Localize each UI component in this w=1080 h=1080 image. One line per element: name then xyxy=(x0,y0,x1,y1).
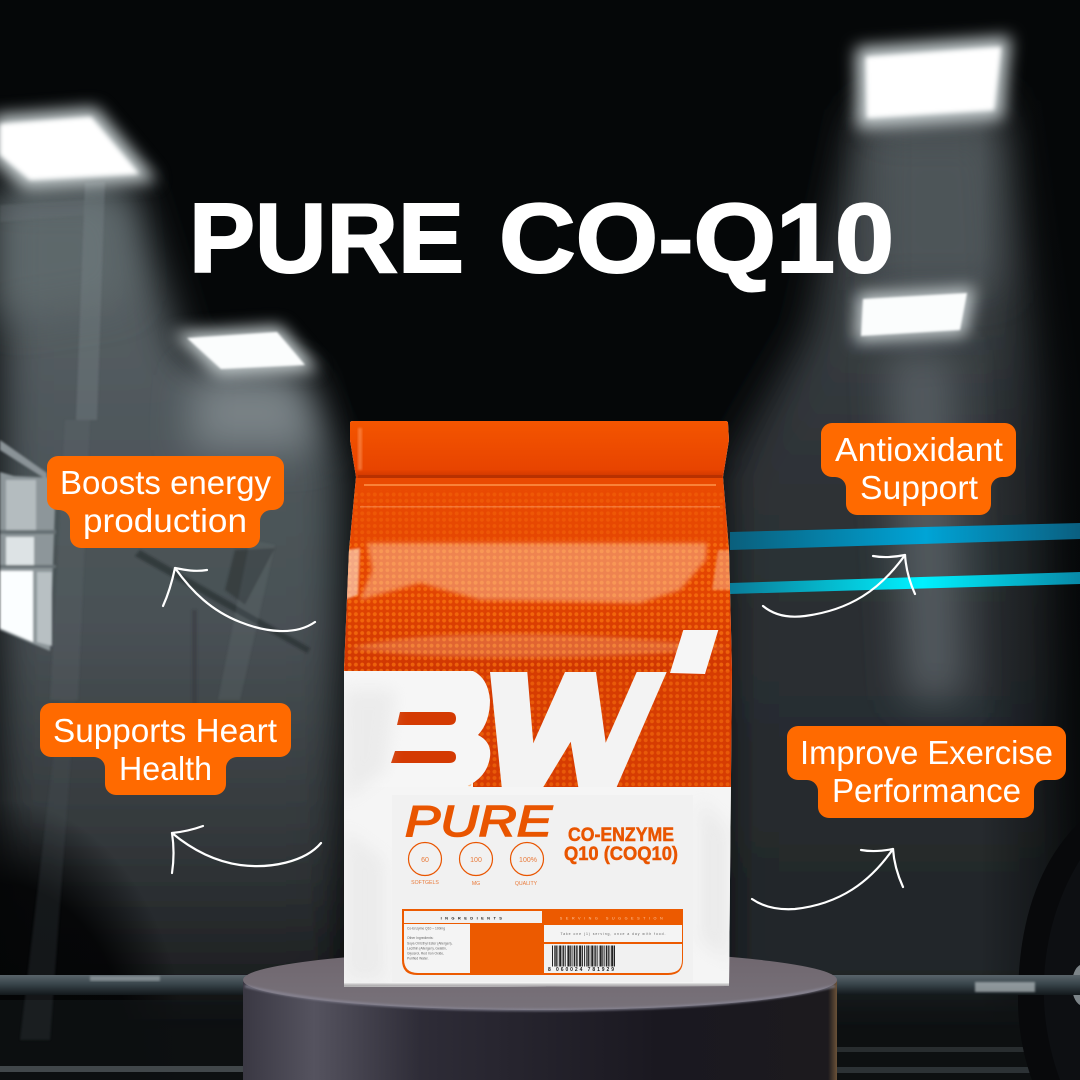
icon: ceiling light top left xyxy=(0,115,143,182)
product name: Q10 (COQ10) xyxy=(564,843,678,865)
window on the left wall xyxy=(0,440,56,651)
arrow: to supports heart xyxy=(172,826,321,873)
callout: boosts energy production: production xyxy=(83,502,247,539)
barbell xyxy=(0,975,1080,995)
arrow: to boosts energy xyxy=(163,568,315,631)
spec badge text: 60 xyxy=(421,857,429,864)
pure logo text: PURE xyxy=(405,797,553,846)
callout: supports heart health xyxy=(40,703,291,795)
arrow: to improve exercise xyxy=(752,849,903,909)
product name xyxy=(564,824,678,865)
barcode xyxy=(548,956,616,973)
information box: Purified Water. xyxy=(407,956,429,960)
spec badge text: QUALITY xyxy=(515,881,538,887)
icon: ceiling light left middle xyxy=(185,331,308,370)
information box: Other Ingredients: xyxy=(407,936,433,940)
callout: antioxidant support: Support xyxy=(860,469,978,506)
callout: antioxidant support xyxy=(821,423,1016,515)
information box: Co-Enzyme Q10 – 100mg xyxy=(407,926,445,930)
product bag xyxy=(340,421,743,989)
callout: boosts energy production: Boosts energy xyxy=(60,464,271,501)
title: PURE xyxy=(189,183,464,293)
spec badge text: SOFTGELS xyxy=(411,880,439,886)
callout: improve exercise performance: Performance xyxy=(832,772,1021,809)
icon: ceiling light right middle xyxy=(860,292,969,337)
arrow: to antioxidant xyxy=(763,555,915,617)
information box: Soya Oil Ethyl Ester (Allergen), xyxy=(407,942,453,946)
spec badge text: 100 xyxy=(470,857,482,864)
information box xyxy=(402,909,683,975)
callout: supports heart health: Supports Heart xyxy=(53,712,277,749)
title: CO-Q10 xyxy=(499,183,894,293)
product label xyxy=(392,795,693,982)
callout: boosts energy production xyxy=(47,456,284,548)
bw logo xyxy=(340,630,718,787)
information box: Lecithin (Allergen), Gelatin, xyxy=(407,946,447,950)
spec badges xyxy=(408,842,544,876)
barcode: 8 060024 781929 xyxy=(548,967,614,973)
icon: ceiling light top right xyxy=(862,43,1004,122)
product name: CO-ENZYME xyxy=(568,824,674,846)
callout: supports heart health: Health xyxy=(119,750,212,787)
callout: improve exercise performance xyxy=(787,726,1066,818)
spec badge text: MG xyxy=(472,881,480,887)
podium xyxy=(243,950,837,1080)
weight plate xyxy=(1018,822,1080,1080)
blue wall stripes xyxy=(730,523,1080,594)
information box: INGREDIENTS xyxy=(441,916,505,920)
information box: Glycerol, Red Iron Oxide, xyxy=(407,952,444,956)
information box: SERVING SUGGESTION xyxy=(560,916,666,920)
spec badge text xyxy=(411,857,538,887)
spec badge text: 100% xyxy=(519,857,537,864)
callout: antioxidant support: Antioxidant xyxy=(835,431,1003,468)
information box: Take one (1) serving, once a day with food. xyxy=(560,932,666,936)
callout: improve exercise performance: Improve Exercise xyxy=(800,734,1053,771)
title xyxy=(189,183,894,293)
